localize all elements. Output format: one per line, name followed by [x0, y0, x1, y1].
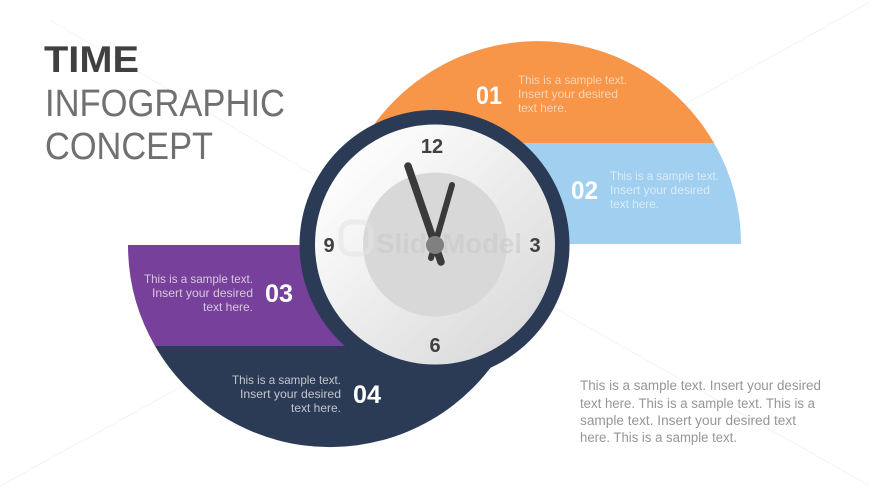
panel: segment 01 orange: Insert your desired — [518, 87, 618, 101]
body text block: here. This is a sample text. — [580, 430, 737, 445]
panel: segment 04 navy — [155, 346, 505, 447]
panel: segment 01 orange: This is a sample text. — [518, 73, 627, 87]
panel: segment 03 purple: text here. — [203, 300, 253, 314]
panel: segment 03 purple: 03 — [265, 280, 293, 308]
body text block: text here. This is a sample text. This is a — [580, 396, 815, 411]
panel: segment 02 light blue: This is a sample text. — [610, 169, 719, 183]
clock numerals: 6 — [429, 335, 441, 357]
panel: segment 01 orange: text here. — [518, 101, 567, 115]
panel: segment 04 navy: This is a sample text. — [232, 373, 341, 387]
panel: segment 01 orange: 01 — [476, 82, 502, 110]
title: TIME — [44, 39, 139, 80]
panel: segment 02 light blue — [335, 143, 741, 244]
panel: segment 02 light blue: Insert your desired — [610, 183, 710, 197]
body text block: sample text. Insert your desired text — [580, 413, 796, 428]
panel: segment 04 navy: text here. — [291, 401, 341, 415]
body text block — [580, 378, 821, 445]
clock hub — [426, 236, 444, 254]
title — [44, 39, 285, 168]
clock numerals: 9 — [323, 235, 335, 257]
clock numerals: 3 — [529, 235, 541, 257]
watermark — [341, 222, 522, 259]
title: INFOGRAPHIC — [45, 83, 285, 125]
title: CONCEPT — [45, 126, 213, 168]
watermark: SlideModel — [376, 228, 522, 259]
clock numerals: 12 — [421, 136, 443, 158]
clock face — [315, 124, 555, 364]
panel: segment 04 navy: Insert your desired — [240, 387, 341, 401]
clock bezel — [300, 110, 570, 380]
clock numerals — [323, 136, 541, 357]
clock inner disc — [363, 172, 507, 316]
panel: segment 01 orange — [362, 41, 714, 143]
panel: segment 03 purple — [128, 245, 400, 346]
panel: segment 02 light blue: text here. — [610, 197, 659, 211]
clock — [300, 110, 570, 380]
panel: segment 03 purple: Insert your desired — [152, 286, 253, 300]
panel: segment 04 navy: 04 — [353, 381, 381, 409]
body text block: This is a sample text. Insert your desired — [580, 378, 821, 393]
panel: segment 03 purple: This is a sample text. — [144, 272, 253, 286]
clock hands — [408, 166, 452, 262]
panel: segment 02 light blue: 02 — [571, 177, 598, 205]
